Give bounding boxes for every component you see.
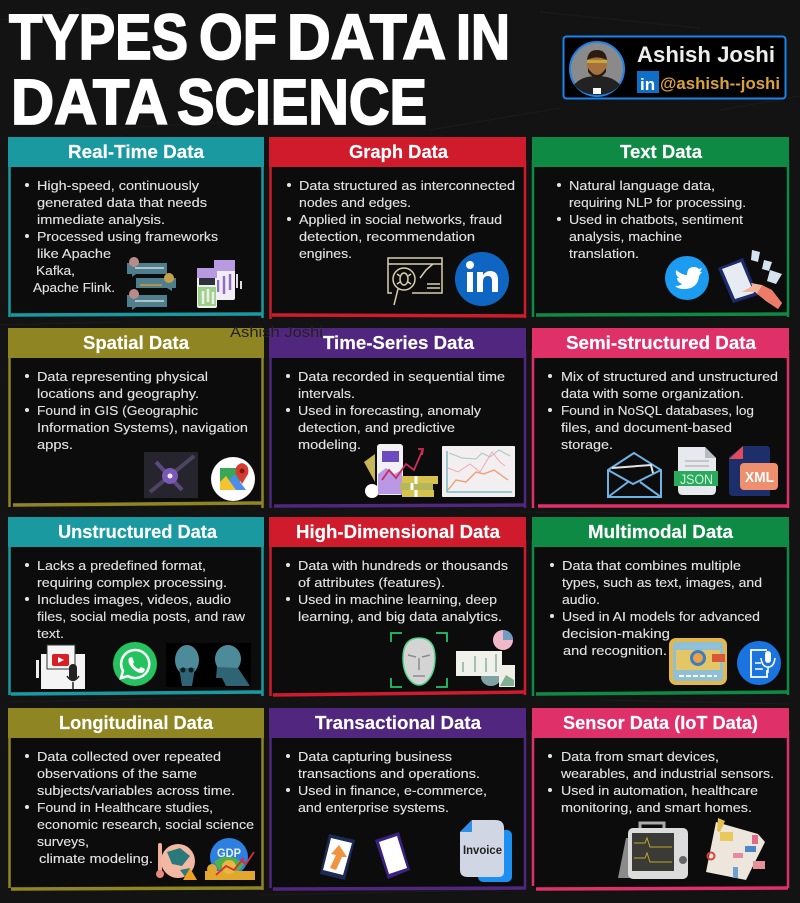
text block: analysis, machine: [569, 229, 682, 244]
text block: subjects/variables across time.: [37, 783, 235, 798]
text block: files, social media posts, and raw: [37, 609, 246, 624]
text block: Kafka,: [36, 263, 75, 278]
text block: Lacks a predefined format,: [37, 558, 206, 573]
text block: detection, recommendation: [299, 229, 475, 244]
text block: Found in NoSQL databases, log: [561, 403, 754, 418]
panel: multimodal data: [532, 517, 789, 696]
text block: climate modeling.: [39, 851, 153, 866]
text block: [25, 369, 248, 452]
icon: twitter: [665, 256, 709, 300]
title: DATA: [287, 1, 446, 73]
title: OF: [199, 1, 277, 73]
panel: spatial data: [8, 328, 264, 508]
icon: smart home map: [706, 818, 765, 880]
heading: Spatial Data: [83, 333, 190, 353]
panel: transactional data: [269, 708, 526, 889]
watermark: Ashish Joshi: [230, 324, 323, 341]
icon: invoice: Invoice: [463, 843, 502, 857]
icon: chat bubbles: [127, 257, 176, 310]
icon: author portrait: [570, 42, 624, 96]
text block: requiring complex processing.: [37, 575, 227, 590]
text block: Includes images, videos, audio: [37, 592, 231, 607]
text block: observations of the same: [37, 766, 197, 781]
icon: open envelope: [608, 453, 661, 497]
icon: video and podcast: [36, 645, 85, 690]
text block: [25, 178, 219, 295]
text block: Mix of structured and unstructured: [561, 369, 778, 384]
icon: gdp globe: [205, 838, 255, 880]
text block: Data representing physical: [37, 369, 208, 384]
title: TYPES: [9, 1, 188, 73]
icon: analytics dashboard: [456, 630, 515, 687]
text block: High-speed, continuously: [37, 178, 200, 193]
text block: [286, 369, 505, 452]
icon: linkedin square: [637, 71, 659, 94]
text block: modeling.: [298, 437, 361, 452]
text block: [557, 178, 746, 261]
text block: wearables, and industrial sensors.: [560, 766, 774, 781]
heading: Time-Series Data: [323, 333, 475, 353]
heading: Real-Time Data: [68, 142, 205, 162]
panel: graph data: [269, 137, 526, 319]
heading: Graph Data: [349, 142, 449, 162]
text block: Data capturing business: [298, 749, 453, 764]
text block: locations and geography.: [37, 386, 199, 401]
icon: gdp globe: GDP: [217, 846, 241, 860]
text block: Information Systems), navigation: [37, 420, 248, 435]
line chart: [442, 446, 515, 497]
icon: linkedin logo: [455, 252, 509, 306]
icon: voice document: [737, 641, 781, 685]
text block: Data from smart devices,: [561, 749, 719, 764]
text block: generated data that needs: [37, 195, 208, 210]
text block: [286, 558, 509, 624]
text block: Processed using frameworks: [37, 229, 219, 244]
text block: [286, 749, 487, 815]
text block: economic research, social science: [37, 817, 254, 832]
title: [9, 1, 510, 138]
text block: surveys,: [37, 834, 89, 849]
text block: translation.: [569, 246, 639, 261]
text block: Apache Flink.: [33, 280, 115, 295]
icon: face recognition: [391, 633, 447, 687]
text block: Used in chatbots, sentiment: [569, 212, 743, 227]
text block: types, such as text, images, and: [562, 575, 762, 590]
heading: High-Dimensional Data: [296, 522, 501, 542]
text block: like Apache: [37, 246, 111, 261]
text block: immediate analysis.: [37, 212, 165, 227]
text block: and recognition.: [563, 643, 667, 658]
text block: audio.: [562, 592, 600, 607]
title: DATA: [11, 66, 168, 138]
text block: Found in GIS (Geographic: [37, 403, 199, 418]
icon: xml file: [729, 446, 778, 496]
text block: Natural language data,: [569, 178, 715, 193]
text block: engines.: [299, 246, 352, 261]
panel: sensor data: [532, 708, 789, 889]
text block: [287, 178, 515, 261]
title: IN: [456, 1, 510, 73]
heading: Semi-structured Data: [566, 333, 757, 353]
icon: invoice: [460, 820, 512, 882]
text block: text.: [37, 626, 64, 641]
panel: real-time data: [8, 137, 264, 318]
icon: patient monitor: [618, 823, 688, 879]
text block: [548, 369, 778, 452]
text block: Applied in social networks, fraud: [299, 212, 502, 227]
text block: Used in finance, e-commerce,: [298, 783, 487, 798]
text block: [25, 749, 254, 866]
text block: data with some organization.: [561, 386, 744, 401]
icon: video player card: [669, 638, 727, 685]
icon: tablet in hand: [718, 250, 782, 309]
icon: skull x-ray: [166, 643, 251, 687]
text block: [550, 558, 762, 658]
text block: [548, 749, 774, 815]
panel: time-series data: [269, 328, 526, 508]
text block: files, and document-based: [561, 420, 732, 435]
panel: high-dimensional data: [269, 517, 526, 696]
text block: monitoring, and smart homes.: [561, 800, 752, 815]
icon: trading phones: [197, 260, 241, 308]
text block: Used in machine learning, deep: [298, 592, 497, 607]
text block: Data structured as interconnected: [299, 178, 515, 193]
text block: Data recorded in sequential time: [298, 369, 505, 384]
text block: Found in Healthcare studies,: [37, 800, 213, 815]
heading: Sensor Data (IoT Data): [563, 713, 758, 733]
text block: intervals.: [298, 386, 355, 401]
text block: and enterprise systems.: [298, 800, 449, 815]
text block: [25, 558, 246, 641]
icon: whatsapp: [113, 642, 157, 686]
text block: Used in automation, healthcare: [561, 783, 758, 798]
icon: finance phone and arrow: [364, 444, 438, 498]
text block: nodes and edges.: [299, 195, 411, 210]
heading: Text Data: [620, 142, 703, 162]
heading: Multimodal Data: [588, 522, 734, 542]
text block: transactions and operations.: [298, 766, 480, 781]
text block: decision-making: [562, 626, 670, 641]
text block: learning, and big data analytics.: [298, 609, 502, 624]
panel: semi-structured data: [532, 328, 789, 508]
icon: bug analysis: [388, 258, 442, 305]
icon: google maps: [211, 457, 255, 501]
text block: Used in AI models for advanced: [562, 609, 760, 624]
text block: apps.: [37, 437, 73, 452]
panel: longitudinal data: [8, 708, 264, 890]
icon: linkedin square: in: [640, 75, 655, 94]
panel: text data: [532, 137, 789, 317]
panel: unstructured data: [8, 517, 264, 696]
icon: json file: JSON: [680, 471, 713, 487]
text block: Data collected over repeated: [37, 749, 221, 764]
icon: warming globe: [156, 843, 197, 880]
icon: phone with upload arrow: [320, 834, 355, 880]
icon: satellite galaxy image: [144, 452, 198, 498]
author badge: [564, 36, 786, 98]
text block: of attributes (features).: [298, 575, 445, 590]
text block: storage.: [561, 437, 613, 452]
author handle: @ashish--joshi: [660, 74, 780, 93]
text block: detection, and predictive: [298, 420, 455, 435]
heading: Unstructured Data: [58, 522, 218, 542]
heading: Transactional Data: [315, 713, 482, 733]
author name: Ashish Joshi: [637, 42, 775, 67]
icon: xml file: XML: [745, 469, 774, 486]
text block: requiring NLP for processing.: [569, 195, 746, 210]
text block: Data that combines multiple: [562, 558, 741, 573]
text block: Used in forecasting, anomaly: [298, 403, 482, 418]
heading: Longitudinal Data: [59, 713, 214, 733]
icon: json file: [674, 447, 718, 495]
title: SCIENCE: [177, 66, 427, 138]
text block: Data with hundreds or thousands: [298, 558, 509, 573]
icon: blank phone: [375, 832, 410, 879]
